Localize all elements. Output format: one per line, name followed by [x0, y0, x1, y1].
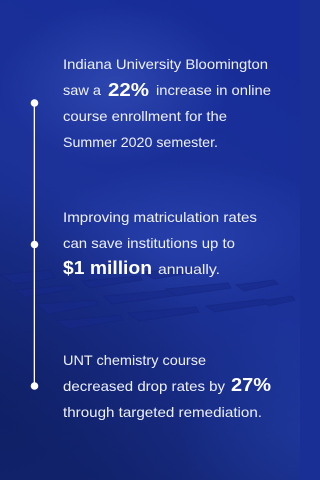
timeline line [34, 103, 35, 386]
text block: UNT chemistry [63, 352, 271, 420]
text block: matriculation: annually. [158, 261, 220, 277]
text block: Indiana University [63, 56, 271, 150]
text block: UNT chemistry: UNT chemistry course [63, 352, 206, 368]
text block: Indiana University: course enrollment for the [63, 108, 227, 124]
text block: Indiana University: 22% [108, 80, 149, 100]
text block: Indiana University: saw a [63, 82, 101, 98]
text block: UNT chemistry: decreased drop rates by [63, 378, 225, 394]
text block: matriculation: can save institutions up to [63, 235, 235, 251]
text block: Indiana University: Indiana University Bloomington [63, 56, 268, 72]
text block: UNT chemistry: 27% [231, 375, 271, 395]
timeline [31, 99, 38, 390]
text block: matriculation [63, 209, 257, 278]
timeline dot 1 [31, 99, 38, 107]
text block: Indiana University: Summer 2020 semester. [63, 134, 218, 150]
timeline dot 3 [31, 382, 38, 390]
text block: UNT chemistry: through targeted remediation. [63, 404, 262, 420]
timeline dot 2 [31, 241, 38, 248]
text block: Indiana University: increase in online [156, 82, 271, 98]
keyboard background image [0, 267, 295, 329]
text block: matriculation: Improving matriculation rates [63, 209, 257, 225]
text block: matriculation: $1 million [63, 258, 152, 278]
